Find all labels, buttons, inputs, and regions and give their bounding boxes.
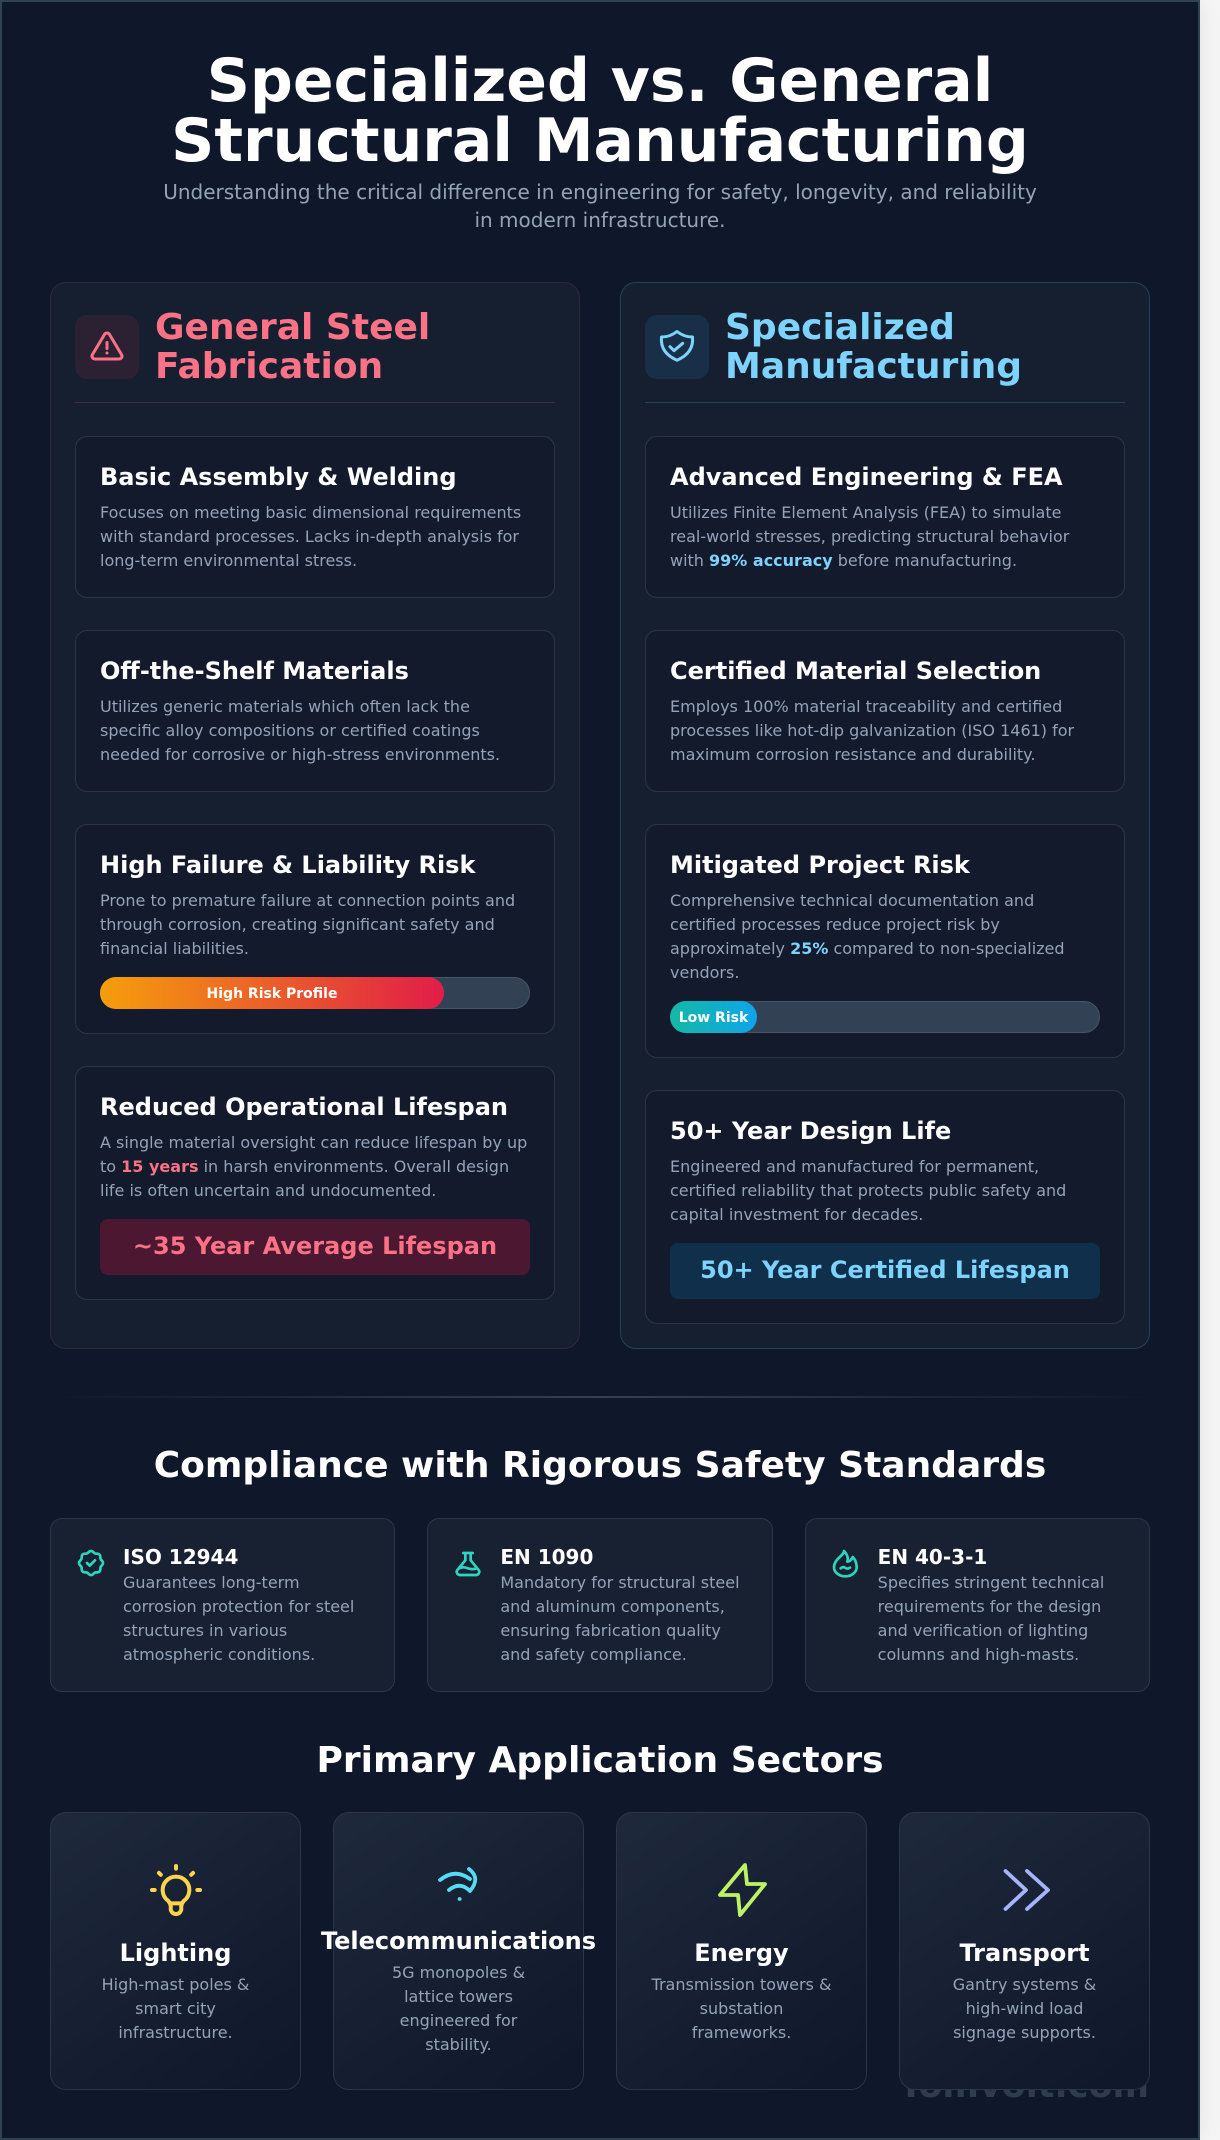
icon: rosette check: [78, 1550, 104, 1576]
card: reduced lifespan: [75, 1066, 555, 1300]
card: mitigated risk: Comprehensive technical documentation and certified processes reduce project risk by approximately 25% compared to non-specialized vendors.: [670, 891, 1065, 982]
lifespan badge: 50+ years: [670, 1243, 1100, 1299]
card: 50+ year life: Engineered and manufactured for permanent, certified reliability that protects public safety and capital investment for decades.: [670, 1157, 1066, 1224]
card: off-the-shelf materials: Utilizes generic materials which often lack the specific alloy compositions or certified coatings needed for corrosive or high-stress environments.: [100, 697, 500, 764]
card: reduced lifespan: A single material oversight can reduce lifespan by up to 15 years in harsh environments. Overall design life is often uncertain and undocumented.: [100, 1133, 527, 1200]
standard card: ISO 12944: [50, 1518, 395, 1692]
sector text: transport: Gantry systems & high-wind load signage supports.: [953, 1974, 1096, 2042]
text: EN 1090: Mandatory for structural steel and aluminum components, ensuring fabrication quality and safety compliance.: [500, 1573, 740, 1664]
card: certified material: [645, 630, 1125, 792]
standard card: EN 1090: [427, 1518, 773, 1692]
heading: specialized: Specialized Manufacturing: [725, 307, 1022, 387]
panel: specialized manufacturing: [620, 282, 1150, 1349]
card: basic assembly: Focuses on meeting basic dimensional requirements with standard processes. Lacks in-depth analysis for long-term environmental stress.: [100, 503, 521, 570]
watermark: Tomvolt.com: [899, 2066, 1149, 2106]
card: 50+ year life: 50+ Year Design Life: [670, 1117, 951, 1145]
sector card: lighting: [50, 1812, 301, 2090]
panel header: specialized: [645, 307, 1125, 403]
standard card: EN 40-3-1: [805, 1518, 1150, 1692]
sector card: energy: [616, 1812, 867, 2090]
lifespan badge: 35 years: ~35 Year Average Lifespan: [133, 1232, 497, 1260]
sector text: telecommunications: 5G monopoles & lattice towers engineered for stability.: [392, 1962, 525, 2054]
sector text: energy: Transmission towers & substation frameworks.: [652, 1974, 831, 2042]
sector card: telecommunications: [333, 1812, 584, 2090]
card: mitigated risk: Mitigated Project Risk: [670, 851, 970, 879]
text: EN 40-3-1: Specifies stringent technical requirements for the design and verification of lighting columns and high-masts.: [878, 1573, 1104, 1664]
sector title: lighting: Lighting: [120, 1938, 231, 1966]
card: advanced engineering: Utilizes Finite Element Analysis (FEA) to simulate real-world stresses, predicting structural behavior with 99% accuracy before manufacturing.: [670, 503, 1069, 570]
heading: compliance: Compliance with Rigorous Safety Standards: [154, 1445, 1046, 1486]
card: off-the-shelf materials: [75, 630, 555, 792]
sector text: lighting: High-mast poles & smart city infrastructure.: [102, 1974, 249, 2042]
card: basic assembly: Basic Assembly & Welding: [100, 463, 456, 491]
risk bar: low: [670, 1001, 1100, 1033]
lifespan badge: 35 years: [100, 1219, 530, 1275]
sector card: transport: [899, 1812, 1150, 2090]
text: ISO 12944: ISO 12944: [123, 1545, 238, 1569]
title: [171, 46, 1029, 176]
card: off-the-shelf materials: Off-the-Shelf Materials: [100, 657, 409, 685]
icon: warning triangle: [75, 315, 139, 379]
text: EN 1090: EN 1090: [500, 1545, 593, 1569]
sector title: transport: Transport: [959, 1938, 1090, 1966]
icon: double chevron: [1004, 1869, 1050, 1911]
card: reduced lifespan: Reduced Operational Lifespan: [100, 1093, 508, 1121]
card: certified material: Certified Material Selection: [670, 657, 1041, 685]
card: mitigated risk: [645, 824, 1125, 1058]
card: advanced engineering: [645, 436, 1125, 598]
sector title: telecommunications: Telecommunications: [321, 1926, 596, 1954]
card: advanced engineering: Advanced Engineering & FEA: [670, 463, 1063, 491]
icon: flame: [832, 1550, 858, 1578]
card: basic assembly: [75, 436, 555, 598]
icon: lightning bolt: [718, 1863, 767, 1917]
icon: flask: [455, 1552, 481, 1576]
card: high failure risk: [75, 824, 555, 1034]
icon: wifi signal: [438, 1867, 478, 1901]
subtitle: Understanding the critical difference in engineering for safety, longevity, and reliability in modern infrastructure.: [163, 180, 1037, 232]
panel header: general: [75, 307, 555, 403]
card: high failure risk: Prone to premature failure at connection points and through corrosion, creating significant safety and financial liabilities.: [100, 891, 515, 958]
card: high failure risk: High Failure & Liability Risk: [100, 851, 475, 879]
card: 50+ year life: [645, 1090, 1125, 1324]
heading: general: General Steel Fabrication: [155, 307, 430, 387]
title: Specialized vs. General: [207, 46, 993, 116]
icon: shield check: [645, 315, 709, 379]
heading: application sectors: Primary Application Sectors: [316, 1740, 884, 1781]
risk bar: high: [100, 977, 530, 1009]
lifespan badge: 50+ years: 50+ Year Certified Lifespan: [700, 1256, 1070, 1284]
text: ISO 12944: Guarantees long-term corrosion protection for steel structures in various atmospheric conditions.: [123, 1573, 354, 1664]
panel: general steel fabrication: [50, 282, 580, 1349]
card: certified material: Employs 100% material traceability and certified processes like hot-dip galvanization (ISO 1461) for maximum corrosion resistance and durability.: [670, 697, 1074, 764]
title: Structural Manufacturing: [171, 106, 1029, 176]
risk bar: low: Low Risk: [679, 1010, 748, 1026]
icon: light bulb: [150, 1864, 202, 1916]
risk bar: high: High Risk Profile: [207, 986, 337, 1002]
text: EN 40-3-1: EN 40-3-1: [878, 1545, 987, 1569]
sector title: energy: Energy: [694, 1938, 789, 1966]
